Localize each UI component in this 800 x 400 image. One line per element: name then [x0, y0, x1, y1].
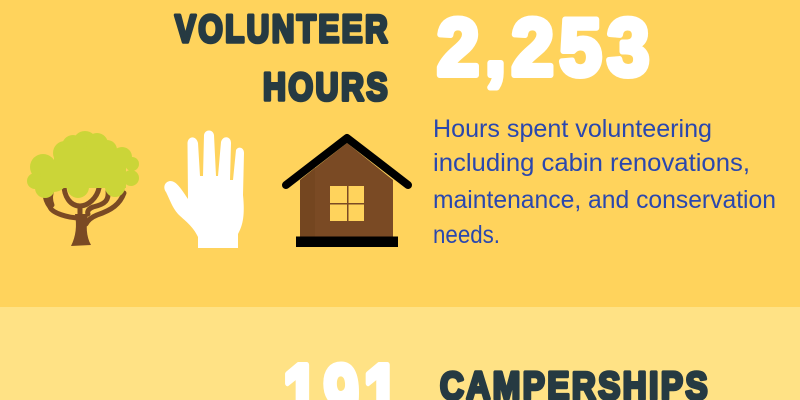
text: volunteering description: Hours spent volunteering [433, 115, 712, 143]
heading: volunteer hours: VOLUNTEER [175, 8, 390, 51]
heading: volunteer hours [175, 8, 390, 109]
icon: house base [296, 236, 398, 247]
text: volunteering description [433, 115, 776, 249]
icon: house roof [286, 138, 408, 185]
text: volunteering description: maintenance, and conservation [433, 186, 776, 214]
panel: volunteer hours [0, 0, 800, 307]
icon: hand [164, 130, 244, 248]
text: volunteering description: needs. [433, 221, 500, 249]
icon: house left wall shade [300, 168, 315, 238]
icon: house [286, 138, 408, 247]
panel: camperships [0, 307, 800, 400]
text: volunteering description: including cabin renovations, [433, 149, 750, 177]
icon: tree [27, 131, 139, 246]
number: 2,253: 2,253 [437, 3, 655, 93]
icon: house window [330, 186, 364, 221]
heading: volunteer hours: HOURS [263, 66, 390, 109]
